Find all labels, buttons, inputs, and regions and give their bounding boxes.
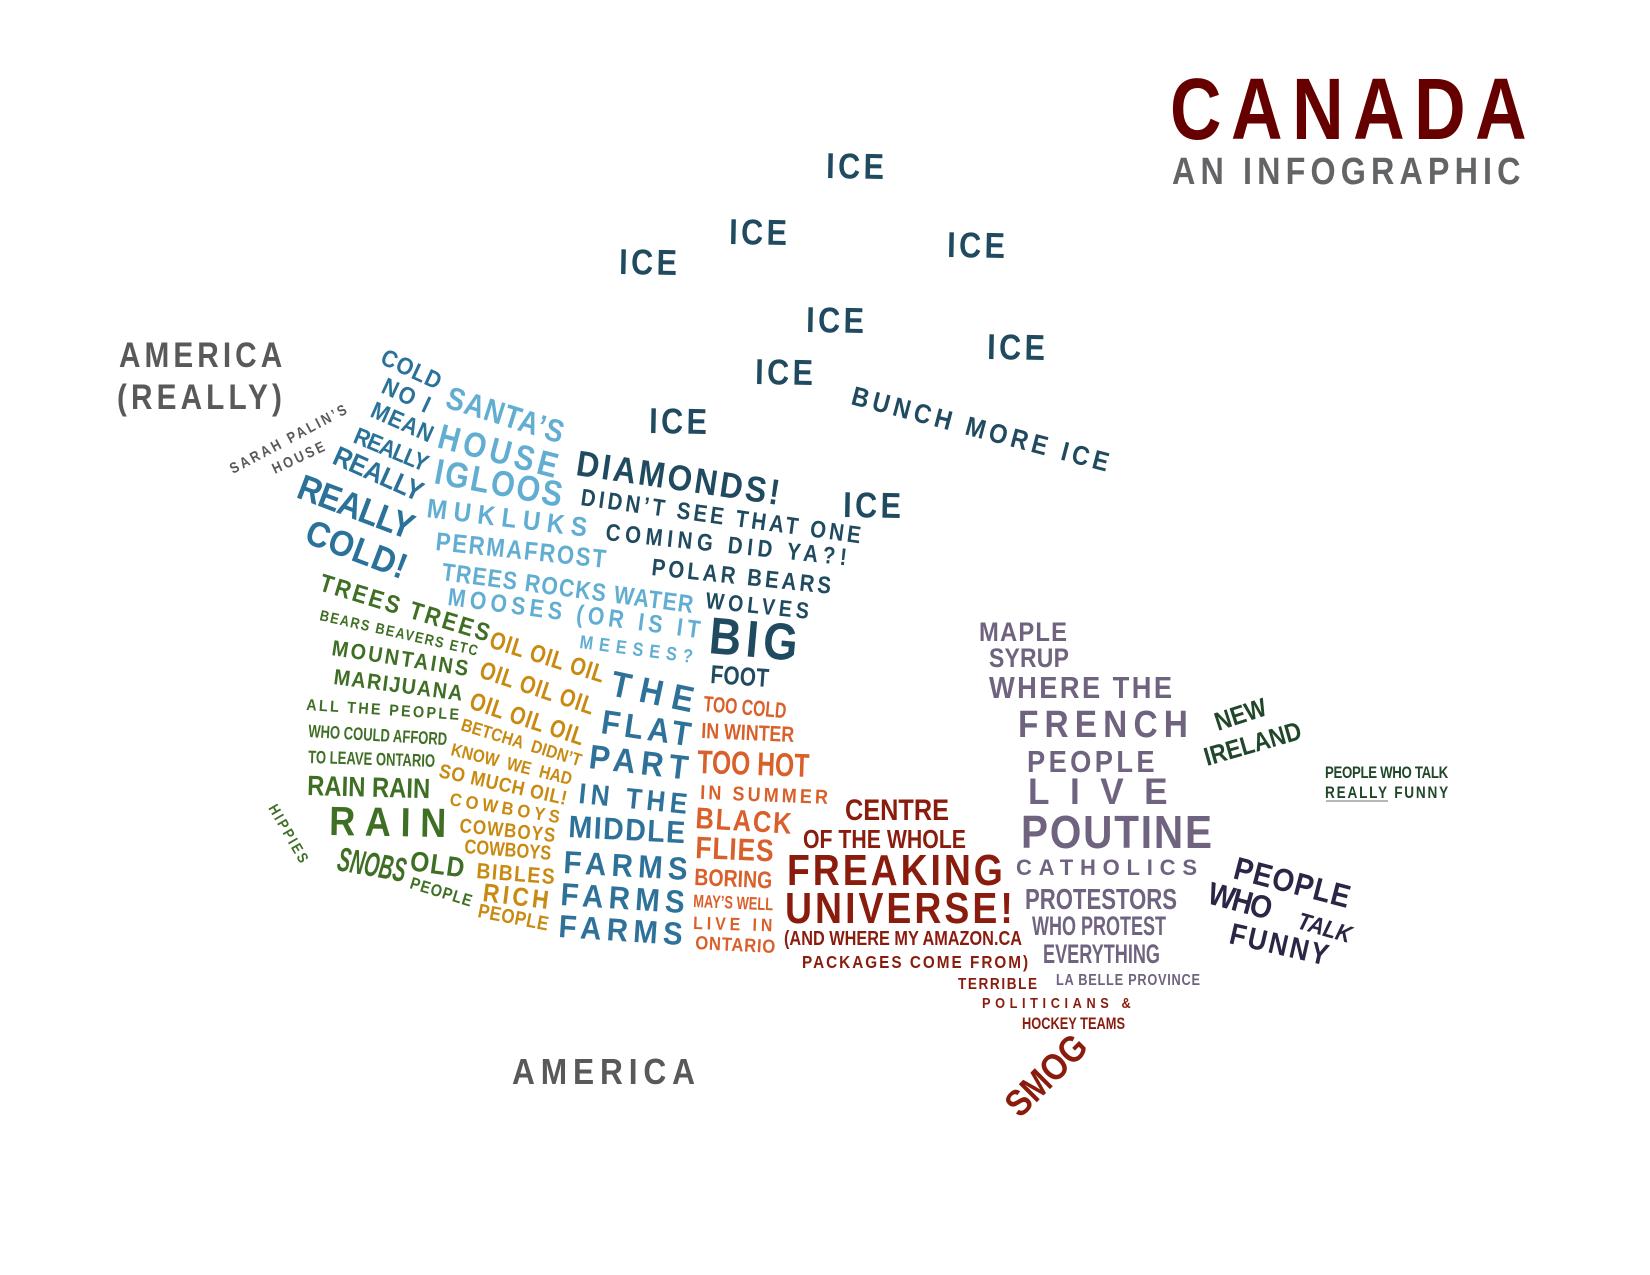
region: Manitoba words: TOO COLD — [703, 691, 787, 723]
region: Alberta words: OIL OIL OIL — [486, 626, 608, 688]
region: British Columbia words: PEOPLE — [408, 875, 474, 911]
region: arctic ice: ICE — [806, 301, 864, 342]
region: British Columbia words: ALL THE PEOPLE — [306, 696, 460, 724]
region: Alberta words: BETCHA DIDN’T — [459, 715, 585, 771]
region: Newfoundland caption — [1325, 764, 1448, 802]
region: Yukon, really cold: NO I — [378, 372, 435, 418]
region: Quebec words: LIVE — [1028, 770, 1168, 812]
region: Manitoba words: MAY’S WELL — [693, 891, 774, 914]
region: Quebec words: MAPLE — [979, 618, 1067, 647]
region: Quebec words: FRENCH — [1018, 703, 1188, 745]
region: Manitoba words: TOO HOT — [697, 743, 810, 784]
region: Northwest Territories words: TREES ROCKS WATER — [440, 558, 695, 618]
region: Quebec words: SYRUP — [989, 643, 1069, 673]
region: New Brunswick and Nova Scotia words: NEW — [1211, 692, 1271, 737]
region: Saskatchewan words: MIDDLE — [568, 810, 686, 850]
region: Ontario words: HOCKEY TEAMS — [1022, 1014, 1125, 1033]
region: New Brunswick and Nova Scotia words: IRELAND — [1200, 715, 1305, 772]
region: Atlantic words: TALK — [1294, 908, 1356, 949]
region: British Columbia words: WHO COULD AFFORD — [308, 721, 448, 749]
label: Sarah Palin's house: HOUSE — [269, 438, 327, 477]
region: Quebec words: CATHOLICS — [1016, 855, 1197, 880]
region: Quebec words: WHERE THE — [989, 671, 1172, 705]
region: Saskatchewan words: FARMS — [563, 844, 689, 887]
region: Saskatchewan words: IN THE — [577, 777, 689, 820]
subtitle: AN INFOGRAPHIC — [1172, 151, 1521, 193]
region: Ontario words — [784, 794, 1131, 1125]
region: Nunavut words: BIG — [707, 607, 800, 673]
region: Northwest Territories words — [425, 380, 702, 667]
region: British Columbia words: HIPPIES — [265, 801, 312, 866]
region: Newfoundland caption: REALLY FUNNY — [1325, 784, 1448, 802]
region: British Columbia words: MOUNTAINS — [330, 636, 470, 681]
region: Nunavut words: WOLVES — [704, 588, 810, 624]
region: Nunavut words: FOOT — [710, 660, 770, 693]
region: British Columbia words: SNOBS — [335, 840, 409, 890]
label: America (really): AMERICA — [119, 336, 282, 375]
region: Ontario words: UNIVERSE! — [785, 883, 1013, 933]
region: arctic ice: ICE — [619, 243, 677, 284]
region: Alberta words: SO MUCH OIL! — [437, 759, 569, 809]
region: Quebec words: PEOPLE — [1027, 745, 1155, 779]
region: Manitoba words: IN WINTER — [701, 718, 795, 747]
region: Alberta words: COWBOYS — [459, 814, 556, 846]
region: Northwest Territories words: SANTA’S — [442, 380, 568, 451]
label: America (really): (REALLY) — [117, 378, 282, 417]
region: Manitoba words: BORING — [694, 864, 773, 894]
region: Northwest Territories words: MUKLUKS — [425, 494, 589, 543]
region: Northwest Territories words: PERMAFROST — [434, 527, 608, 574]
region: Northwest Territories words: MOOSES (OR IS IT — [446, 583, 702, 644]
region: Alberta words: OIL OIL OIL — [466, 687, 588, 751]
region: Northwest Territories words: HOUSE — [434, 417, 562, 485]
region: New Brunswick and Nova Scotia words — [1200, 692, 1305, 772]
region: arctic ice: ICE — [947, 226, 1005, 267]
region: Yukon, really cold: REALLY — [292, 468, 420, 548]
region: Saskatchewan words: THE — [607, 664, 697, 721]
region: Yukon, really cold: MEAN — [367, 396, 438, 448]
region: British Columbia words: OLD — [408, 845, 467, 884]
region: Ontario words: FREAKING — [787, 845, 1003, 895]
region: British Columbia words: TO LEAVE ONTARIO — [308, 747, 435, 771]
region: Quebec words: LA BELLE PROVINCE — [1056, 972, 1200, 989]
region: British Columbia words: MARIJUANA — [332, 665, 464, 706]
region: British Columbia words — [265, 569, 493, 911]
region: Yukon, really cold: REALLY — [328, 440, 429, 508]
region: Yukon, really cold — [292, 343, 446, 587]
region: Alberta words: COWBOYS — [464, 834, 552, 864]
region: Saskatchewan words: PART — [587, 737, 690, 787]
region: Quebec words: WHO PROTEST — [1032, 911, 1166, 941]
region: Atlantic words: WHO — [1204, 876, 1276, 927]
region: Alberta words: RICH — [481, 879, 550, 915]
region: Ontario words: CENTRE — [845, 794, 949, 827]
region: arctic ice: ICE — [755, 353, 813, 394]
region: Manitoba words: BLACK — [695, 801, 792, 840]
region: Quebec words — [979, 618, 1212, 989]
region: Ontario words: OF THE WHOLE — [803, 824, 966, 854]
region: Northwest Territories words: IGLOOS — [431, 452, 566, 515]
title: Canada: CANADA — [1170, 60, 1527, 158]
region: Nunavut words: DIAMONDS! — [574, 443, 782, 513]
label: Sarah Palin's house: SARAH PALIN’S — [226, 401, 349, 477]
region: Alberta words: OIL OIL OIL — [476, 656, 598, 720]
region: British Columbia words: TREES TREES — [316, 569, 493, 647]
region: Quebec words: EVERYTHING — [1043, 939, 1160, 969]
region: Ontario words: SMOG — [997, 1026, 1096, 1125]
region: Alberta words: COWBOYS — [448, 789, 562, 827]
region: Manitoba words: LIVE IN — [693, 913, 773, 936]
region: Saskatchewan words: FARMS — [560, 876, 686, 920]
region: Manitoba words: FLIES — [695, 831, 774, 869]
region: Alberta words: KNOW WE HAD — [449, 739, 574, 789]
region: Northwest Territories words: MEESES? — [578, 631, 694, 667]
region: arctic ice: BUNCH MORE ICE — [848, 381, 1112, 478]
region: Alberta words: BIBLES — [476, 859, 556, 889]
region: Nunavut words — [574, 443, 863, 693]
region: Saskatchewan words — [558, 664, 697, 952]
region: Yukon, really cold: COLD — [377, 343, 446, 395]
region: Atlantic words: PEOPLE — [1230, 851, 1354, 915]
region: Manitoba words: ONTARIO — [695, 932, 776, 957]
region: Newfoundland caption: PEOPLE WHO TALK — [1325, 764, 1448, 782]
region: British Columbia words: RAIN — [329, 799, 447, 847]
title block — [1170, 60, 1527, 193]
region: Nunavut words: DIDN’T SEE THAT ONE — [579, 484, 863, 549]
region: Alberta words — [437, 626, 608, 935]
region: Quebec words: PROTESTORS — [1025, 884, 1177, 916]
region: Yukon, really cold: REALLY — [350, 422, 433, 477]
region: Atlantic words: FUNNY — [1227, 916, 1332, 972]
region: arctic ice — [619, 147, 1112, 527]
region: Saskatchewan words: FARMS — [558, 908, 684, 952]
region: Ontario words: TERRIBLE — [958, 976, 1037, 993]
region: British Columbia words: BEARS BEAVERS ETC — [318, 606, 480, 659]
region: Nunavut words: POLAR BEARS — [650, 554, 832, 599]
region: Manitoba words: IN SUMMER — [700, 782, 829, 809]
region: Ontario words: PACKAGES COME FROM) — [802, 952, 1028, 972]
region: Ontario words: (AND WHERE MY AMAZON.CA — [784, 928, 1022, 950]
region: Yukon, really cold: COLD! — [300, 513, 413, 587]
region: Alberta words: PEOPLE — [476, 899, 551, 935]
region: arctic ice: ICE — [843, 486, 901, 527]
region: British Columbia words: RAIN RAIN — [307, 770, 431, 804]
region: Nunavut words: COMING DID YA?! — [604, 519, 848, 571]
region: arctic ice: ICE — [826, 147, 884, 188]
region: Saskatchewan words: FLAT — [599, 703, 694, 754]
region: Ontario words: POLITICIANS & — [982, 994, 1131, 1011]
region: arctic ice: ICE — [987, 328, 1045, 369]
region: Quebec words: POUTINE — [1021, 808, 1212, 859]
region: Atlantic words — [1204, 851, 1356, 972]
label: America (really) — [117, 336, 282, 417]
region: arctic ice: ICE — [729, 213, 787, 254]
label: America: AMERICA — [512, 1052, 695, 1092]
region: arctic ice: ICE — [649, 402, 707, 443]
region: Manitoba words — [693, 691, 829, 957]
